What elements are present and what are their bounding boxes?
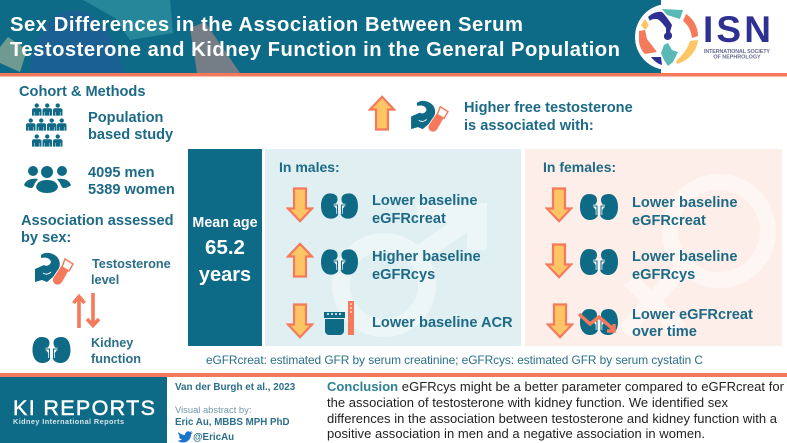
row: higher baseline eGFRcys: Higher baseline xyxy=(372,249,481,265)
icon: declining trend arrow xyxy=(579,314,614,331)
text: kidney function: Kidney xyxy=(91,336,133,350)
panel: mean age: years xyxy=(199,264,251,286)
ISN logo xyxy=(635,4,771,70)
panel: KI Reports logo xyxy=(0,377,167,443)
panel: cohort and methods xyxy=(19,84,175,366)
row: higher baseline eGFRcys: eGFRcys xyxy=(372,267,435,283)
text: testosterone level: Testosterone xyxy=(92,257,171,271)
footer rule xyxy=(0,373,787,377)
text: sample size xyxy=(88,165,175,198)
female symbol watermark xyxy=(624,182,768,332)
icon: testosterone arm xyxy=(411,101,448,132)
credits: Van der Burgh et al., 2023 xyxy=(175,382,296,393)
text: headline: Higher free testosterone xyxy=(464,100,633,116)
text: headline: is associated with: xyxy=(464,118,594,134)
higher free testosterone headline xyxy=(370,97,633,134)
icon: testosterone arm xyxy=(35,253,73,285)
row: lower baseline eGFRcreat xyxy=(547,188,737,229)
row: lower eGFRcreat over time xyxy=(548,304,753,340)
conclusion text: Conclusion eGFRcys might be a better parameter compared to eGFRcreat for xyxy=(327,379,785,394)
conclusion text: the association of testosterone with kidney function. We identified sex xyxy=(327,395,728,410)
row: lower eGFRcreat over time: over time xyxy=(632,324,697,340)
panel: mean age: Mean age xyxy=(192,215,258,231)
text: kidney function: function xyxy=(91,352,141,366)
title: Sex Differences in the Association Between Serum xyxy=(10,14,523,36)
text: population based study: based study xyxy=(88,127,174,143)
icon: population xyxy=(26,103,66,147)
panel: KI Reports logo: Kidney International Reports xyxy=(13,417,124,426)
icon: up arrow xyxy=(370,97,394,130)
credits xyxy=(175,382,296,443)
ISN subtitle: INTERNATIONAL SOCIETY xyxy=(704,49,770,55)
ISN wordmark: ISN xyxy=(703,9,771,50)
row: lower eGFRcreat over time: Lower eGFRcreat xyxy=(632,307,753,323)
credits: @EricAu xyxy=(193,432,234,443)
heading: association assessed by sex xyxy=(21,213,174,246)
text: sample size: 4095 men xyxy=(88,165,155,181)
heading: in males: In males: xyxy=(279,159,340,175)
title: Testosterone and Kidney Function in the General Population xyxy=(10,39,620,61)
icon: bidirectional arrows xyxy=(74,293,99,328)
credits: Visual abstract by: xyxy=(175,404,251,415)
icon: kidney xyxy=(32,337,70,363)
logo ring xyxy=(639,9,698,66)
text: testosterone level xyxy=(91,257,171,287)
row: lower baseline eGFRcreat xyxy=(288,188,477,227)
text: testosterone level: level xyxy=(91,273,119,287)
icon: twitter bird xyxy=(178,431,193,442)
conclusion text: differences in the association between testosterone and kidney function with a xyxy=(327,411,778,426)
credits: Eric Au, MBBS MPH PhD xyxy=(175,417,289,428)
caption: abbreviations: eGFRcreat: estimated GFR by serum creatinine; eGFRcys: estimated GFR by serum cystatin C xyxy=(206,353,703,367)
row: lower baseline eGFRcys: Lower baseline xyxy=(632,249,737,265)
text: sample size: 5389 women xyxy=(88,182,175,198)
panel: males xyxy=(265,149,521,346)
row: lower baseline ACR xyxy=(288,301,513,337)
text: headline xyxy=(464,100,633,134)
panel: KI Reports logo: KI REPORTS xyxy=(13,396,155,420)
title xyxy=(10,14,620,61)
heading: association assessed by sex: by sex: xyxy=(21,230,71,246)
row: lower baseline eGFRcreat: Lower baseline xyxy=(372,193,477,209)
male symbol watermark xyxy=(341,213,477,328)
heading: association assessed by sex: Association assessed xyxy=(21,213,174,229)
panel: mean age xyxy=(188,149,262,346)
heading: cohort and methods: Cohort & Methods xyxy=(19,84,145,100)
row: lower baseline eGFRcreat: Lower baseline xyxy=(632,195,737,211)
row: higher baseline eGFRcys xyxy=(288,244,481,283)
row: lower baseline eGFRcreat: eGFRcreat xyxy=(632,213,706,229)
ISN subtitle second line: OF NEPHROLOGY xyxy=(713,54,761,60)
conclusion text xyxy=(327,379,785,441)
text: population based study: Population xyxy=(88,110,163,126)
text: kidney function xyxy=(91,336,141,366)
row: lower baseline eGFRcys xyxy=(547,244,737,283)
heading: in females: In females: xyxy=(543,159,616,175)
text: population based study xyxy=(88,110,174,143)
row: lower baseline eGFRcys: eGFRcys xyxy=(632,267,695,283)
icon: urine cup and dipstick xyxy=(324,301,354,335)
header banner xyxy=(0,0,787,76)
panel: females xyxy=(525,149,782,346)
panel: mean age: 65.2 xyxy=(205,236,245,259)
row: lower baseline ACR: Lower baseline ACR xyxy=(372,315,513,331)
row: lower baseline eGFRcreat: eGFRcreat xyxy=(372,211,446,227)
conclusion text: positive association in men and a negative association in women. xyxy=(327,426,705,441)
icon: participants group xyxy=(24,166,71,193)
